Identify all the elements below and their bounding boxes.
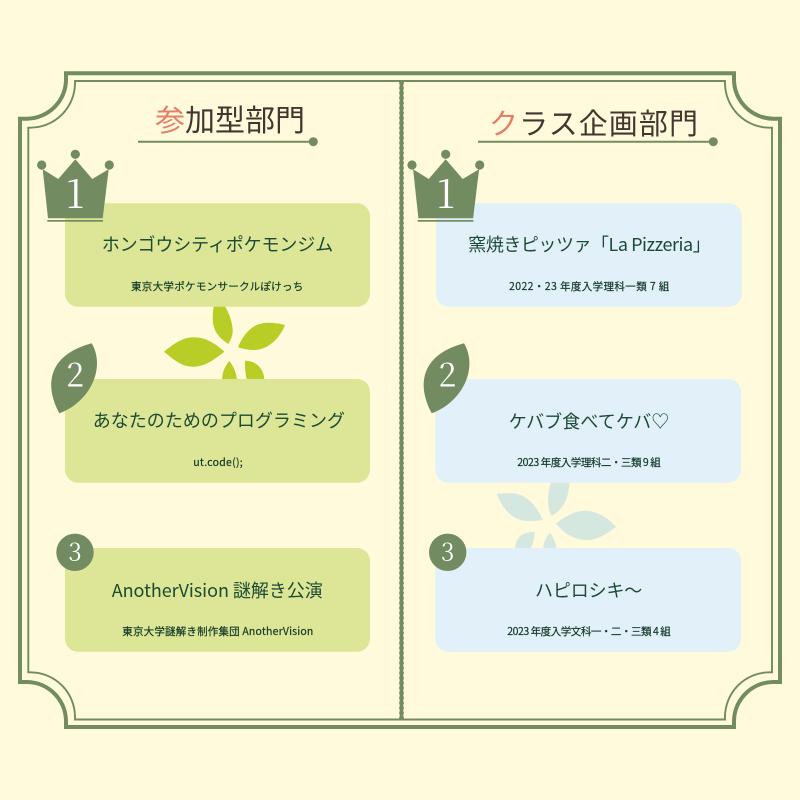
icon: circle rank 3 (429, 532, 466, 571)
center dotted divider (400, 81, 403, 719)
card: rank 3 (65, 548, 370, 652)
card: rank 1 (436, 203, 742, 307)
panel: クラス企画部門 (407, 101, 742, 652)
flower: green leaves (164, 296, 285, 400)
icon: leaf rank 2: 2 (438, 351, 456, 397)
heading underline (478, 137, 718, 146)
icon: crown rank 1: 1 (66, 164, 84, 220)
card: rank 3 (435, 548, 741, 652)
card: rank 1 (65, 203, 370, 307)
icon: circle rank 3: 3 (441, 532, 454, 568)
panel: 参加型部門 (37, 96, 370, 652)
card: rank 2 (435, 379, 741, 483)
heading: 参加型部門: 参加型部門 (155, 96, 305, 140)
card: rank 3: ハピロシキ〜 (535, 577, 642, 603)
card: rank 2 (65, 379, 370, 483)
icon: crown rank 1 (37, 150, 114, 222)
card: rank 3: 東京大学謎解き制作集団 AnotherVision (122, 624, 313, 639)
icon: circle rank 3: 3 (68, 532, 82, 568)
card: rank 1: 2022・23 年度入学理科一類 7 組 (509, 279, 670, 294)
heading: クラス企画部門: クラス企画部門 (489, 101, 698, 143)
icon: crown rank 1 (407, 150, 484, 222)
card: rank 2: 2023 年度入学理科二・三類 9 組 (517, 455, 661, 470)
card: rank 3: 2023 年度入学文科一・二・三類 4 組 (507, 624, 671, 639)
card: rank 2: ケバブ食べてケバ♡ (509, 408, 669, 434)
heading underline (138, 137, 318, 146)
card: rank 1: 窯焼きピッツァ「La Pizzeria」 (468, 231, 711, 257)
icon: circle rank 3 (56, 532, 94, 571)
card: rank 1: ホンゴウシティポケモンジム (102, 231, 333, 257)
icon: leaf rank 2: 2 (66, 351, 84, 397)
card: rank 3: AnotherVision 謎解き公演 (112, 577, 323, 603)
icon: leaf rank 2 (424, 343, 469, 413)
icon: leaf rank 2 (51, 343, 97, 413)
card: rank 1: 東京大学ポケモンサークルぽけっち (131, 279, 303, 294)
card: rank 2: ut.code(); (193, 455, 243, 470)
card: rank 2: あなたのためのプログラミング (93, 407, 345, 433)
decorative frame (20, 73, 780, 727)
icon: crown rank 1: 1 (437, 164, 455, 220)
flower: pale leaves (497, 476, 616, 560)
